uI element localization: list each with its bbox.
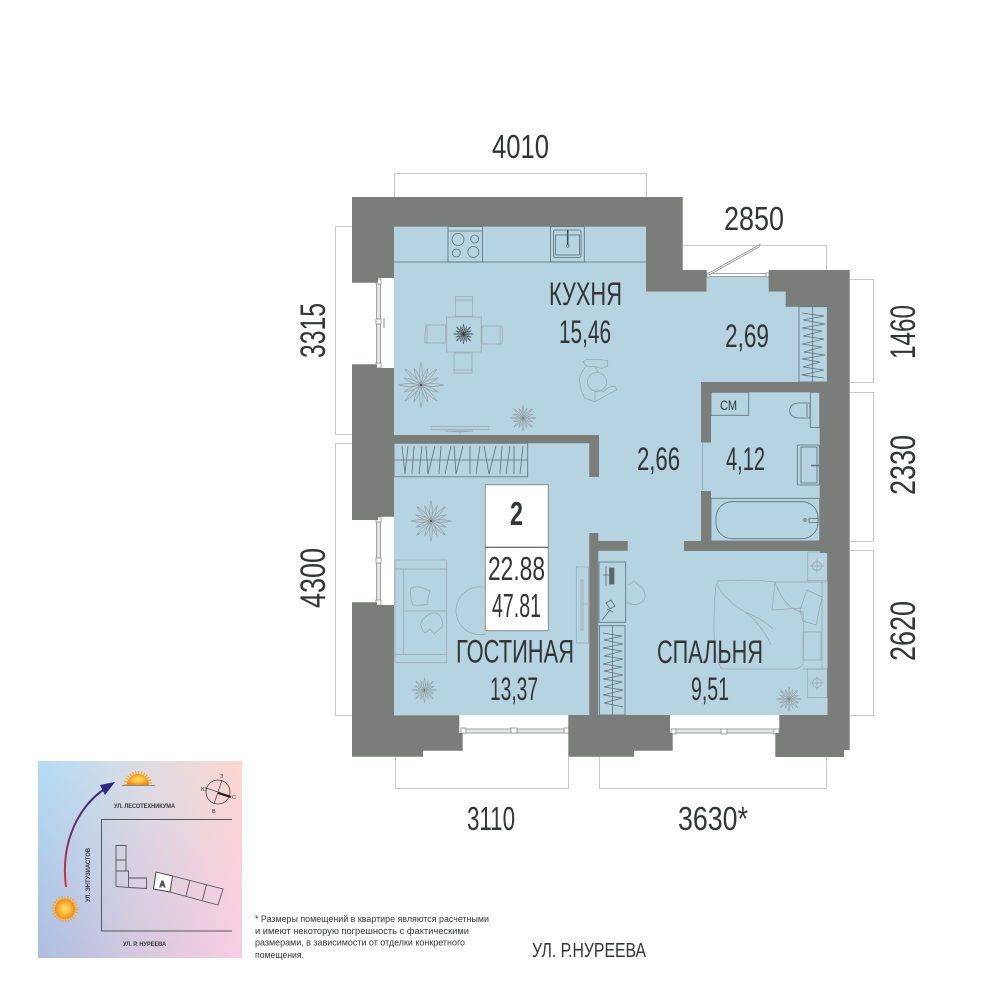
room label: kitchen: 15,46 (559, 314, 611, 350)
label: washing machine: СМ (720, 397, 737, 413)
dimension: 2330: 2330 (884, 435, 923, 495)
furniture: armchair (580, 359, 617, 402)
icon: bedside lamp bottom (808, 669, 827, 698)
icon: stove (448, 227, 482, 262)
icon: compass: В (212, 809, 216, 815)
floor: apartment rooms (394, 226, 827, 715)
room label: kitchen: КУХНЯ (549, 276, 622, 312)
balcony door (707, 244, 769, 277)
furniture: dining table with chairs (425, 296, 502, 373)
footnote (255, 914, 489, 960)
building blocks (116, 846, 223, 905)
icon: plant bedroom (777, 687, 801, 711)
room label: bedroom: 9,51 (691, 671, 729, 707)
room label: bedroom: СПАЛЬНЯ (657, 634, 763, 670)
icon: compass (201, 774, 236, 815)
info box: rooms and area (485, 485, 548, 631)
icon: small plant kitchen (510, 405, 536, 431)
section A: А (160, 880, 166, 889)
room label: living room (456, 634, 574, 707)
room label: bathroom 4,12: 4,12 (726, 441, 765, 477)
furniture: bedroom wardrobe (600, 626, 625, 715)
room label: bedroom (657, 634, 763, 707)
furniture: kitchen counter (394, 227, 646, 262)
info box: rooms and area: 47.81 (492, 587, 541, 624)
icon: large plant kitchen (398, 362, 444, 408)
furniture: kitchen TV (431, 426, 489, 435)
dimension: 2850: 2850 (724, 200, 784, 237)
furniture: desk chair (626, 581, 645, 604)
furniture: door swing arc living room (456, 587, 486, 635)
dimension: 2620: 2620 (884, 601, 923, 661)
icon: washbasin (797, 445, 819, 485)
icon: washing machine box (711, 392, 749, 415)
furniture: bathroom fixtures (711, 392, 820, 541)
icon: midday sun (122, 772, 155, 786)
icon: bathtub (711, 498, 820, 541)
room label: hall 2,69: 2,69 (725, 318, 769, 354)
room label: living room: 13,37 (490, 671, 538, 707)
furniture: hall wardrobe (799, 307, 827, 382)
icon: toilet (790, 392, 820, 428)
info box: rooms and area: 22.88 (488, 550, 545, 587)
icon: small plant living room (412, 678, 437, 702)
room label: corridor 2,66: 2,66 (637, 441, 680, 477)
dimension: 4010: 4010 (492, 128, 549, 165)
site boundary (102, 820, 232, 931)
furniture: living room TV stand (576, 567, 589, 643)
window: living room south (461, 728, 569, 733)
furniture: desk (599, 562, 626, 622)
label: enthusiasts street: УЛ. ЭНТУЗИАСТОВ (85, 848, 92, 902)
icon: plant living room (411, 501, 451, 541)
windows (376, 244, 779, 734)
walls (352, 197, 850, 757)
icon: bedside lamp top (808, 552, 827, 581)
footnote: * Размеры помещений в квартире являются расчетными (255, 914, 489, 924)
icon: rising sun (54, 898, 76, 920)
footnote: помещения. (255, 950, 304, 960)
panel: site orientation map (38, 761, 242, 958)
icon: compass: Ю (201, 787, 207, 793)
furniture: bed (714, 580, 827, 669)
icon: kitchen sink (550, 227, 584, 262)
dimension: 3315: 3315 (294, 303, 333, 358)
room label: living room: ГОСТИНАЯ (456, 634, 574, 670)
icon: compass: З (220, 774, 224, 780)
arrow: sun path (65, 782, 115, 887)
label: nureev street small: УЛ. Р. НУРЕЕВА (123, 941, 166, 948)
dimension: 1460: 1460 (884, 305, 923, 359)
dimension: 3630*: 3630* (678, 800, 748, 837)
icon: table flower (453, 324, 474, 344)
window: kitchen (376, 279, 384, 368)
street label: УЛ. Р.НУРЕЕВА (532, 940, 647, 962)
dimension lines (336, 174, 874, 788)
label: forestry street: УЛ. ЛЕСОТЕХНИКУМА (114, 803, 175, 810)
window: living room (376, 517, 381, 605)
footnote: размерами, в зависимости от отделки конкретного (255, 938, 465, 948)
dimension: 3110: 3110 (467, 800, 515, 837)
footnote: и имеют некоторую погрешность с фактическими (255, 926, 469, 936)
dimension: 4300: 4300 (294, 548, 333, 608)
furniture: sofa (395, 560, 447, 663)
room label: kitchen (549, 276, 622, 350)
info box: rooms and area: 2 (510, 495, 523, 532)
furniture: living room wardrobe (394, 443, 528, 477)
bathroom door line (702, 442, 704, 491)
window: bedroom south (671, 729, 779, 734)
icon: compass: С (232, 795, 236, 801)
